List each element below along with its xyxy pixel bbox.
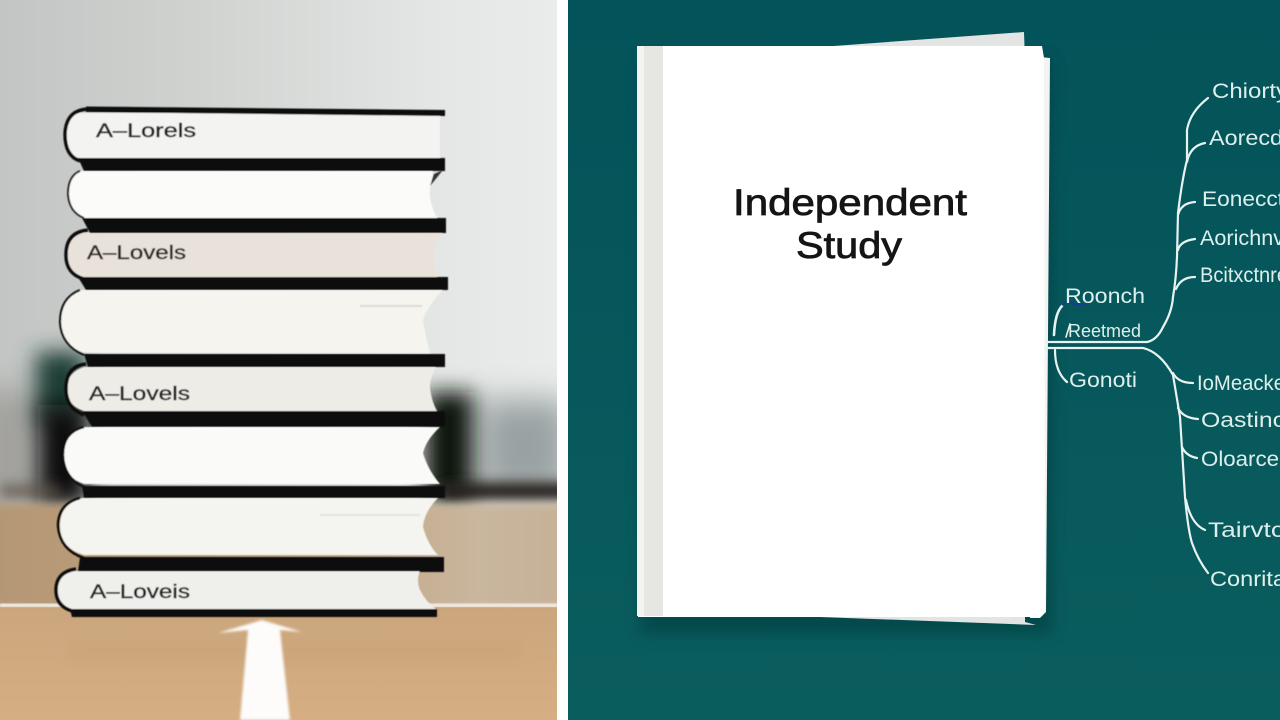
mind map labels: [1065, 80, 1280, 591]
mind map connectors: [1045, 98, 1208, 573]
label: Oloarce: Oloarce: [1201, 448, 1279, 471]
divider gap: [557, 0, 568, 720]
label: Conrita: Conrita: [1210, 568, 1280, 591]
book 2: [68, 170, 446, 233]
label: Oastinc: Oastinc: [1201, 409, 1280, 432]
book 5: [66, 364, 445, 427]
label: Aorichnv: Aorichnv: [1200, 227, 1280, 250]
label: Aorecd: Aorecd: [1209, 127, 1280, 150]
document title: Independent: [733, 182, 968, 223]
book 7: [58, 498, 444, 572]
teal background: [568, 0, 1280, 720]
label: Roonch: Roonch: [1065, 285, 1145, 308]
blurred wall background: [0, 0, 557, 607]
book label: A–Lovels: [87, 243, 186, 264]
label: Eonecct: Eonecct: [1202, 188, 1280, 211]
binding strip: [637, 46, 663, 616]
document: Independent Study: [637, 32, 1050, 625]
book 4: [60, 290, 445, 367]
label: Reetmed: Reetmed: [1068, 321, 1141, 341]
book 1: [65, 106, 445, 171]
blue accent mark: [1062, 302, 1086, 305]
book 6: [63, 427, 445, 498]
wooden table: [0, 504, 567, 720]
arrow pointing up to the stack: [218, 620, 302, 720]
document subtitle: Study: [796, 225, 903, 266]
label: Gonoti: Gonoti: [1069, 369, 1137, 392]
document shadow: [640, 60, 1052, 634]
panel: Independent Study document and mind map: [568, 0, 1280, 720]
label: Chiorty: Chiorty: [1212, 80, 1280, 103]
book 3: [66, 230, 448, 290]
book label: A–Loveis: [90, 582, 190, 603]
book 8: [56, 569, 437, 617]
book label: A–Lorels: [96, 121, 196, 142]
label: Tairvtc: Tairvtc: [1208, 519, 1280, 542]
panel: A-Levels book stack photo: [0, 0, 570, 720]
book label: A–Lovels: [89, 384, 190, 405]
